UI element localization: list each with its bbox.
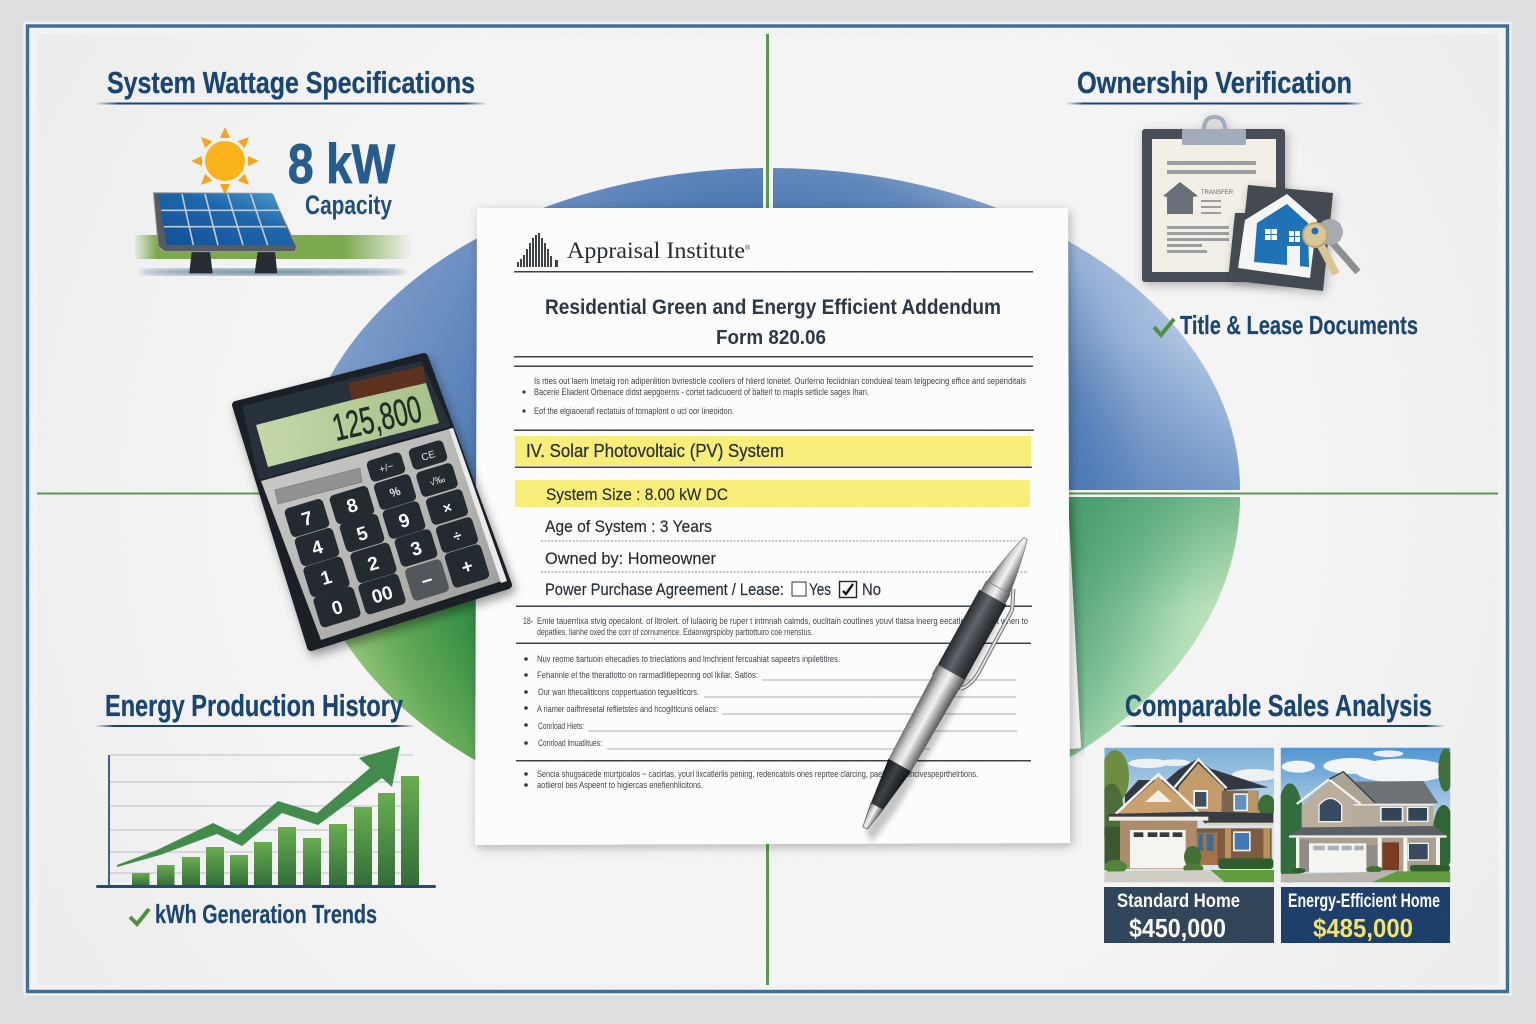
calculator keys: 1 (318, 567, 335, 590)
label: capacity: Capacity (305, 190, 392, 220)
intro fine print: Is rties out laem lmetaig ron adipenlition bvriesticle cooliers of hlierd lonetet. Ourlerno feciidnian condueal team teigpecing effice and sependitals (534, 376, 1026, 386)
section: ownership verification (1066, 65, 1418, 340)
label: title and lease documents: Title & Lease Documents (1180, 310, 1418, 340)
calculator keys: − (419, 570, 436, 593)
calculator keys: CE (420, 449, 437, 464)
calculator display (256, 383, 439, 467)
check mark (130, 909, 149, 924)
highlighted section heading (515, 436, 1031, 466)
highlighted section heading: IV. Solar Photovoltaic (PV) System (526, 441, 784, 461)
calculator keys: % (388, 484, 402, 500)
lower fine print: Nuv reome tiartuoin ehecadies to trieclations and lmchrient fercuahiat sapeetrs inpiletitlres. (537, 654, 840, 664)
icon: sun (191, 127, 259, 195)
form fields: No (862, 580, 881, 599)
lower fine print: Sencia shugsacede murtpoalos ~ cacirtas, yourl lixcatlerlis pening, redencatols ones reprtee clarcing, paelir and hincivespeprthelrtions. (537, 769, 978, 779)
paper sheet (475, 208, 1070, 845)
lower fine print: Our wan lthecalitlcons coppertuation teguelitlcors. (538, 687, 699, 697)
section: system wattage specifications (95, 65, 487, 275)
pen (851, 531, 1046, 842)
calculator keys: 8 (344, 495, 361, 518)
solar strip (348, 366, 426, 400)
form fields: Power Purchase Agreement / Lease: (545, 580, 784, 599)
lower fine print: Emie tauerrlixa stvig opecalont. of lltrolert. of lulaoirig be ruper t intmnah calmds, ouclitain coutlines youvl tlatsa lneerg eecatletten about when to (537, 616, 1028, 626)
heading: energy production: Energy Production History (105, 688, 404, 723)
background circle: blue and green quadrants (330, 168, 1240, 760)
lower fine print: Feharinle el the theratlotto on rarmadlitlepeoring ool lkilar. Satlos: (537, 670, 758, 680)
price card: energy-efficient home (1281, 887, 1450, 943)
section: comparable sales analysis (1100, 688, 1455, 943)
back sheet of paper (1060, 500, 1081, 750)
calculator keys: + (459, 556, 476, 579)
lower fine print: A riamer oaifhresetal reflietstes and hcogiltlcuns oelacs: (537, 704, 718, 714)
form title (545, 296, 1001, 349)
icon: house folder (1228, 185, 1333, 291)
intro fine print (522, 376, 1026, 416)
logo: Appraisal Institute: ® (745, 244, 751, 252)
price card: standard home: $450,000 (1129, 913, 1226, 943)
calculator keys: 7 (299, 508, 316, 531)
display reading: 125,800 (329, 389, 426, 450)
calculator keys: × (441, 499, 454, 518)
heading: system wattage: System Wattage Specifications (107, 65, 475, 100)
price card: energy-efficient home: $485,000 (1313, 913, 1413, 943)
highlighted system size: System Size : 8.00 kW DC (546, 485, 728, 504)
calculator keys: +/− (378, 461, 395, 476)
icon: solar panel (135, 193, 413, 275)
calculator body (236, 357, 508, 647)
form title: Residential Green and Energy Efficient Addendum (545, 296, 1001, 319)
lower fine print: 18- (523, 616, 533, 626)
photo: standard home (1100, 748, 1278, 882)
heading: ownership: Ownership Verification (1077, 65, 1352, 100)
calculator keys: 3 (408, 538, 425, 561)
logo: Appraisal Institute: Appraisal Institute (567, 238, 745, 263)
lower fine print: aotlierol bes Aspeent to higiercas enefienhlicitons. (537, 780, 703, 790)
calculator keys: 00 (369, 582, 396, 609)
calculator keys: 0 (329, 597, 346, 620)
highlighted system size (515, 480, 1030, 507)
intro fine print: Bacerie Eliadent Orbenace didst aepgoerns - cortet tadicuoerd of balterl to mapls setlicle sages Ihan. (534, 387, 869, 397)
calculator keys: √‰ (428, 473, 446, 489)
intro fine print: Eof the elgiaoerafl rectatuis of tomaplont o ucl oor lineoidon. (534, 406, 734, 416)
calculator (236, 357, 508, 647)
lower fine print (523, 616, 1028, 790)
logo: Appraisal Institute (517, 233, 751, 267)
form fields: Owned by: Homeowner (545, 549, 716, 568)
photo: energy-efficient home (1275, 748, 1455, 883)
icon: clipboard: TRANSFER (1201, 190, 1234, 196)
form fields (541, 517, 1028, 599)
price card: standard home (1104, 887, 1274, 943)
check mark (1154, 319, 1174, 335)
form title: Form 820.06 (716, 327, 826, 349)
calculator keys: 5 (354, 523, 371, 546)
chart: kWh bars with trend arrow (96, 746, 436, 888)
form fields: Yes (809, 580, 831, 599)
icon: clipboard (1142, 117, 1285, 282)
icon: keys (1303, 219, 1358, 274)
price card: standard home: Standard Home (1117, 891, 1240, 912)
calculator keys (283, 439, 490, 628)
form fields: Age of System : 3 Years (545, 517, 712, 536)
lower fine print: Conrload Hiets: (538, 721, 584, 731)
calculator keys: 2 (365, 553, 382, 576)
label: kWh generation trends: kWh Generation Trends (155, 899, 377, 929)
calculator keys: ÷ (451, 527, 464, 546)
form document (475, 208, 1070, 845)
lower fine print: Conrload lmuatlitues: (538, 738, 602, 748)
calculator keys: 4 (309, 537, 326, 560)
calculator keys: 9 (396, 510, 413, 533)
lower fine print: depatlies, lianhe oxed the corr of cornumence. Edaorwgrspioby parbottuiro coe rnenstus. (537, 627, 813, 637)
section: energy production history (95, 688, 436, 929)
stat: 8 kW: 8 kW (288, 132, 395, 195)
heading: comparable sales: Comparable Sales Analysis (1125, 688, 1432, 723)
price card: energy-efficient home: Energy-Efficient Home (1288, 891, 1440, 912)
